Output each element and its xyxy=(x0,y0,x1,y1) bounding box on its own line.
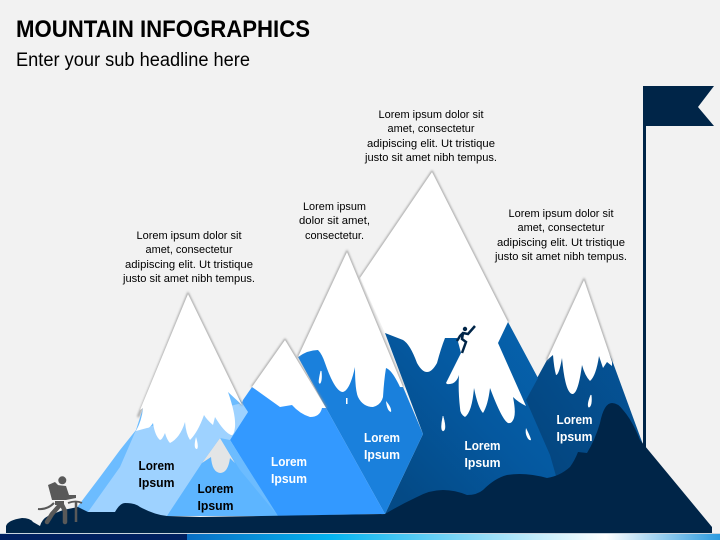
text block: fifth mountain: adipiscing elit. Ut tristique xyxy=(497,237,625,249)
mountain 1 xyxy=(75,294,278,516)
flag xyxy=(643,86,714,448)
ground xyxy=(6,403,712,533)
text block: fifth mountain xyxy=(494,208,627,263)
text block: fifth mountain: amet, consectetur xyxy=(518,222,605,234)
text block: third mountain: dolor sit amet, xyxy=(299,215,370,227)
text block: tallest mountain xyxy=(364,109,497,164)
label: lower peak: Ipsum xyxy=(198,498,234,513)
mountain 5 xyxy=(500,280,645,510)
icon: hiker xyxy=(38,476,82,522)
snow drip xyxy=(319,371,321,383)
label: third mountain xyxy=(364,430,400,462)
text block: first mountain: justo sit amet nibh tempus. xyxy=(122,273,255,285)
label: tallest mountain xyxy=(464,438,500,470)
label: lower peak: Lorem xyxy=(198,481,234,496)
label: second mountain xyxy=(271,454,307,486)
label: fifth mountain: Lorem xyxy=(556,412,592,427)
label: lower peak xyxy=(198,481,234,513)
label: third mountain: Lorem xyxy=(364,430,400,445)
text block: tallest mountain: adipiscing elit. Ut tristique xyxy=(367,138,495,150)
snow drip xyxy=(386,401,391,412)
text block: tallest mountain: amet, consectetur xyxy=(388,123,475,135)
snow drip xyxy=(442,416,445,431)
mountain 3 xyxy=(298,252,423,514)
snow drip xyxy=(346,398,348,404)
label: third mountain: Ipsum xyxy=(364,447,400,462)
text block: first mountain xyxy=(122,230,255,285)
snow cap xyxy=(136,294,242,443)
lower peak xyxy=(167,438,278,516)
text block: third mountain: Lorem ipsum xyxy=(303,201,366,213)
text block: fifth mountain: justo sit amet nibh tempus. xyxy=(494,251,627,263)
label: fifth mountain: Ipsum xyxy=(556,429,592,444)
mountain 2 xyxy=(230,340,385,516)
text block: tallest mountain: Lorem ipsum dolor sit xyxy=(378,109,484,121)
snow drip xyxy=(526,428,531,440)
label: fifth mountain xyxy=(556,412,592,444)
title: MOUNTAIN INFOGRAPHICS xyxy=(16,16,310,43)
band xyxy=(0,533,720,540)
subtitle: Enter your sub headline here xyxy=(16,50,250,71)
snow drip xyxy=(588,395,591,407)
label: second mountain: Ipsum xyxy=(271,471,307,486)
lower peak snow xyxy=(202,438,235,473)
text block: first mountain: adipiscing elit. Ut tristique xyxy=(125,259,253,271)
icon: climber on peak xyxy=(457,326,475,353)
mountain 4 xyxy=(360,172,560,514)
text block: third mountain xyxy=(299,201,370,242)
text block: third mountain: consectetur. xyxy=(305,230,364,242)
text block: fifth mountain: Lorem ipsum dolor sit xyxy=(508,208,614,220)
label: first mountain xyxy=(138,458,174,490)
label: first mountain: Ipsum xyxy=(138,475,174,490)
snow drip xyxy=(195,437,198,449)
label: tallest mountain: Ipsum xyxy=(464,455,500,470)
text block: first mountain: amet, consectetur xyxy=(146,244,233,256)
label: second mountain: Lorem xyxy=(271,454,307,469)
text block: tallest mountain: justo sit amet nibh tempus. xyxy=(364,152,497,164)
label: first mountain: Lorem xyxy=(138,458,174,473)
text block: first mountain: Lorem ipsum dolor sit xyxy=(136,230,242,242)
label: tallest mountain: Lorem xyxy=(464,438,500,453)
